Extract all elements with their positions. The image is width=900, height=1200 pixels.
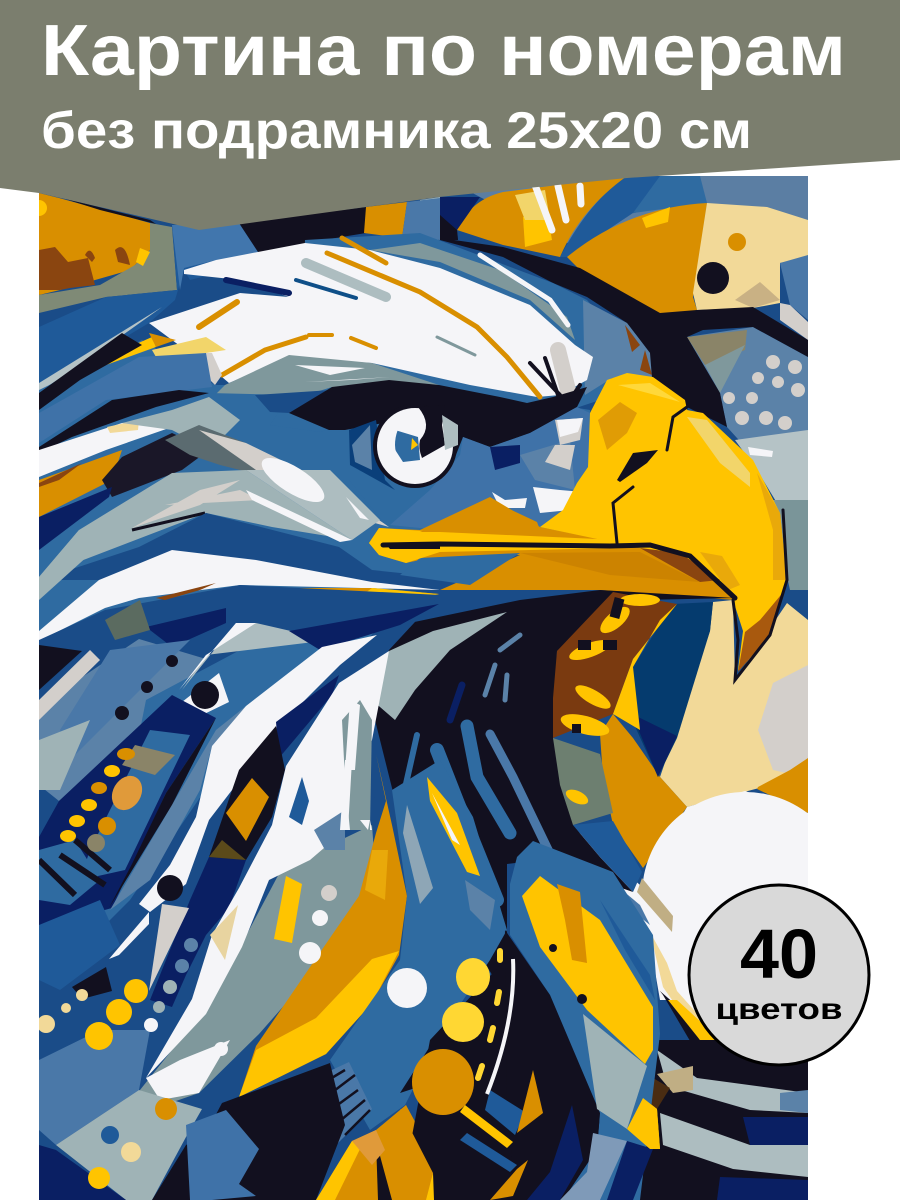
- gold patch in dark hole: [209, 726, 285, 860]
- big blue feather with yellow oval: [500, 841, 660, 1200]
- painting: eagle paint by numbers: [31, 176, 848, 1200]
- eye: [349, 404, 458, 490]
- gold feather under beak: [300, 588, 439, 595]
- yellow feather tip: [368, 588, 439, 595]
- upper beak: [540, 373, 787, 670]
- black arc behind head: [440, 238, 808, 427]
- dotted panel right of the beak: [687, 327, 808, 590]
- golden neck pattern: [553, 592, 677, 892]
- left gold and yellow feather accent: [106, 337, 156, 365]
- lower left patches: [39, 1030, 150, 1145]
- patch stripes and tan overlay: [627, 1098, 660, 1149]
- white lower band: [39, 550, 440, 641]
- white and gray dots: [176, 885, 337, 1089]
- white feather one: [139, 635, 377, 912]
- beak: [369, 373, 787, 680]
- black side stripes: [39, 333, 142, 410]
- background lower right: [579, 600, 808, 1040]
- blue band behind crest: [304, 233, 612, 408]
- gray teal feather field: [140, 825, 376, 1110]
- white crest: [149, 243, 593, 397]
- lower centre ellipses and bars: [400, 951, 543, 1200]
- leaf pattern lens: [39, 695, 216, 928]
- yellow crescent edge: [239, 951, 399, 1097]
- eagle head base: [39, 233, 652, 641]
- yellow bar: [274, 876, 302, 943]
- badge number: 40: [740, 915, 818, 993]
- black dot and gray lens: [72, 875, 189, 999]
- badge: 40 colours: [689, 885, 869, 1065]
- gray band above eye: [216, 355, 439, 394]
- white left band: [39, 423, 172, 477]
- bottom black area: [152, 960, 560, 1200]
- background upper right: [420, 176, 808, 340]
- blue strip beside lens: [100, 630, 377, 930]
- bottom gold shapes: [316, 1105, 432, 1200]
- blue beside dark band: [110, 706, 246, 910]
- colour dots lower left: [37, 938, 198, 1189]
- crest streaks: [199, 238, 580, 400]
- feather patch above beak: [583, 300, 652, 395]
- white feather two: [146, 651, 389, 1078]
- lower mandible: [369, 497, 735, 600]
- cheek feathers under eye: [390, 407, 590, 530]
- neck blue streaks: [403, 635, 553, 900]
- badge label: цветов: [716, 993, 842, 1026]
- brow and black eye area: [289, 380, 587, 456]
- gold crescent: [239, 754, 407, 1097]
- eye spot on feather: [183, 673, 229, 713]
- header banner: [0, 0, 900, 230]
- lower left feather mass: [37, 583, 440, 1200]
- title: Картина по номерам: [41, 11, 846, 91]
- navy gap between feathers: [276, 675, 339, 758]
- centre blue feather: [306, 760, 507, 1149]
- gray crest band: [370, 243, 575, 340]
- upper left background: [31, 193, 440, 392]
- subtitle: без подрамника 25х20 см: [41, 102, 752, 160]
- gray cheek streaks: [39, 470, 352, 577]
- navy under hole: [150, 857, 246, 1007]
- neck black mass: [376, 590, 732, 974]
- neck gray streak: [372, 612, 507, 720]
- gray triangle bottom left: [56, 1090, 202, 1200]
- lower right stripes: [560, 1040, 808, 1200]
- gold left feather: [39, 450, 122, 517]
